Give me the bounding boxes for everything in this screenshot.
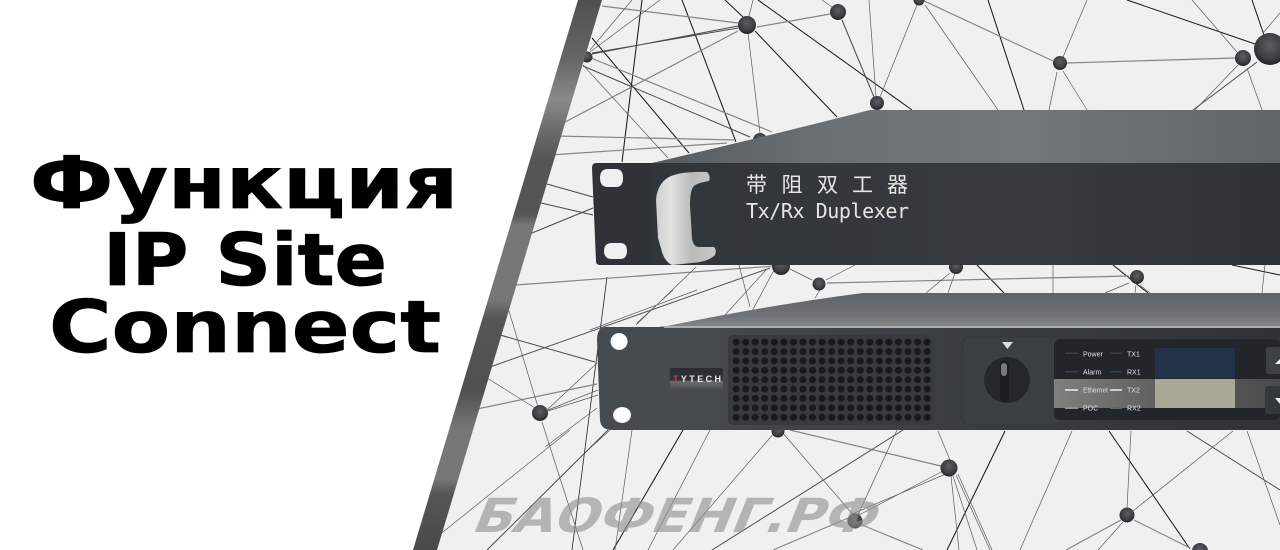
- duplexer rack ear: [592, 163, 652, 265]
- TYTECH badge: T YTECH: [673, 374, 721, 384]
- watermark: БАОФЕНГ.РФ: [465, 489, 890, 544]
- repeater mounting holes: [612, 334, 630, 422]
- status labels: RX1: [1127, 370, 1141, 376]
- status labels: Power: [1083, 352, 1104, 358]
- status labels: [1083, 352, 1141, 412]
- knob panel: [962, 337, 1062, 425]
- repeater rack ear: [597, 327, 664, 430]
- status labels: Ethernet: [1083, 388, 1108, 394]
- status LEDs: [1065, 352, 1122, 409]
- status labels: POC: [1083, 406, 1098, 412]
- TYTECH badge: [670, 368, 723, 391]
- status labels: Alarm: [1083, 370, 1101, 376]
- repeater front panel: [655, 328, 1280, 430]
- LCD screen: [1155, 348, 1235, 378]
- status labels: TX2: [1127, 388, 1140, 394]
- diagonal grey band: [413, 0, 602, 550]
- duplexer label: [746, 174, 909, 223]
- title: IP Site: [103, 218, 387, 302]
- title: Функция: [30, 141, 458, 225]
- device: TYTECH repeater: [597, 293, 1280, 430]
- status display panel: [1054, 339, 1280, 420]
- rotary knob: [984, 357, 1030, 403]
- duplexer label: 带阻双工器: [746, 174, 908, 197]
- device: Tx/Rx duplexer: [592, 110, 1280, 265]
- duplexer label: Tx/Rx Duplexer: [746, 199, 909, 223]
- ventilation grille: [728, 335, 935, 425]
- network nodes: [532, 0, 1280, 550]
- knob indicator triangle: [1002, 342, 1013, 349]
- duplexer front panel: [650, 163, 1280, 265]
- status labels: RX2: [1127, 406, 1141, 412]
- white left panel: [0, 0, 579, 550]
- up button: [1266, 347, 1280, 374]
- status labels: TX1: [1127, 352, 1140, 358]
- duplexer top face: [652, 110, 1280, 163]
- duplexer handle: [656, 172, 716, 265]
- title: [30, 141, 458, 369]
- repeater top face: [667, 293, 1280, 328]
- down button: [1265, 386, 1280, 414]
- title: Connect: [49, 285, 441, 369]
- network lines: [438, 0, 1280, 550]
